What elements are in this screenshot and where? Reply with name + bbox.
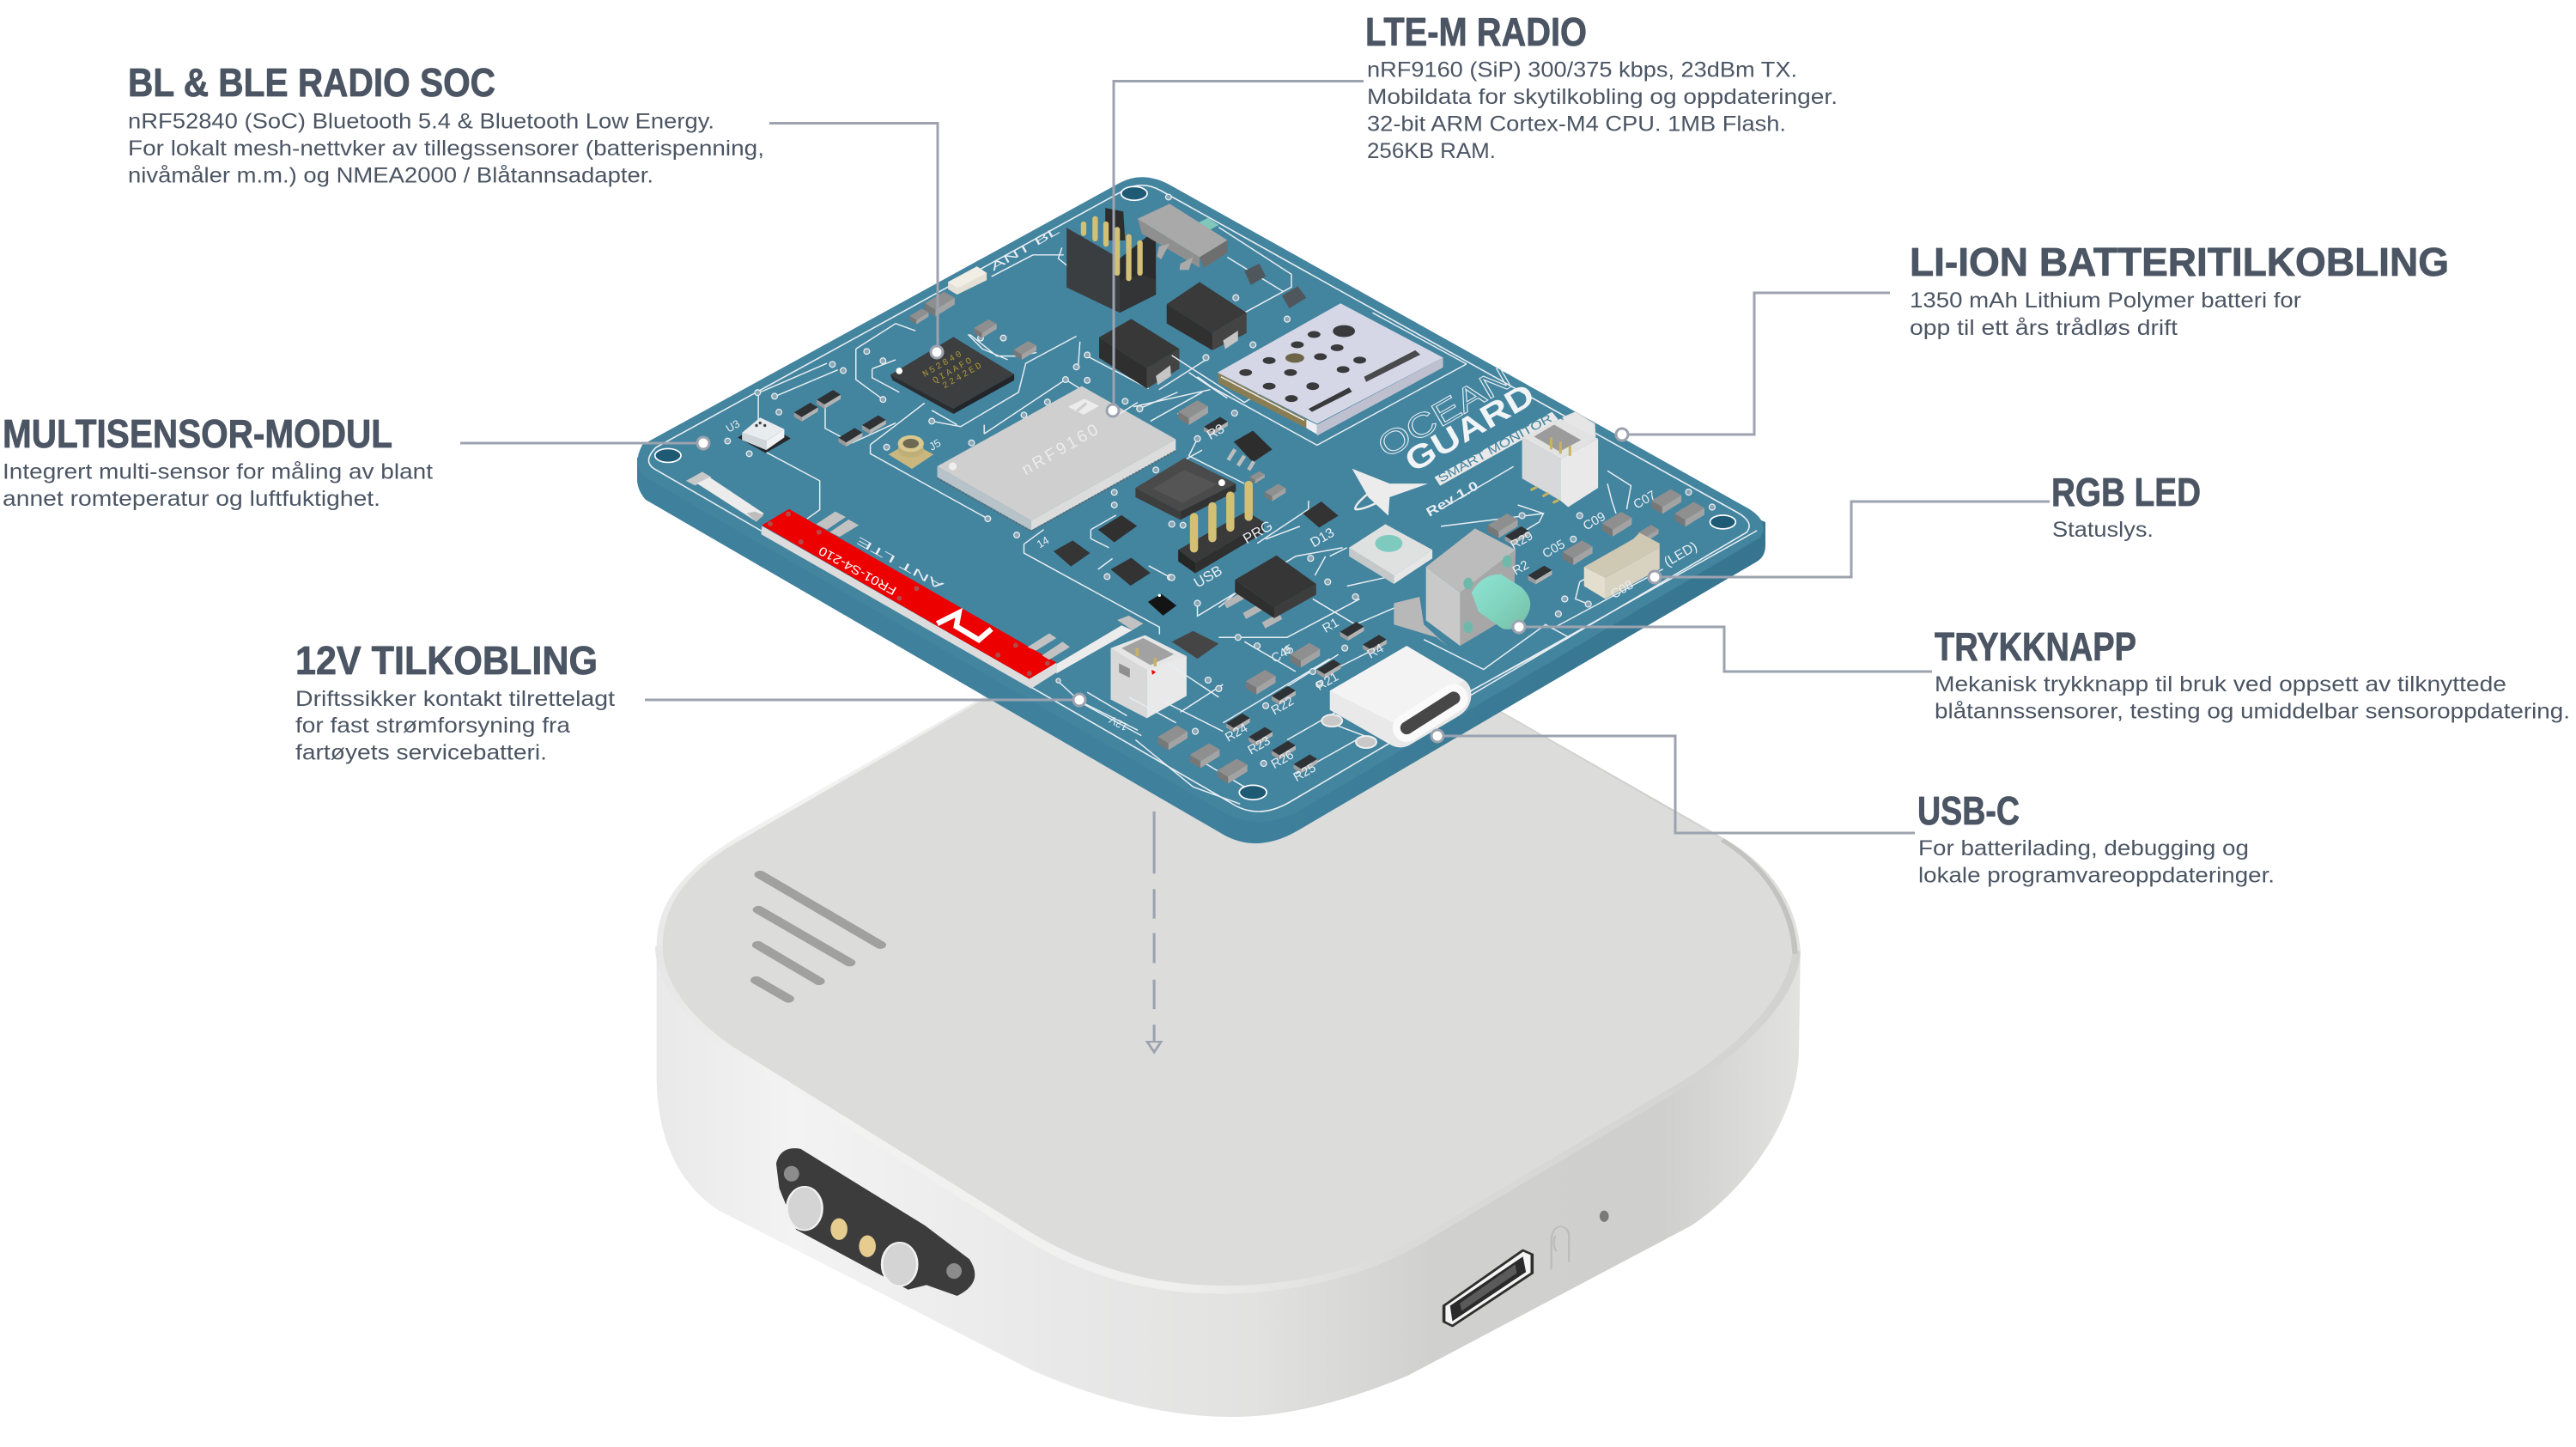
USB-C port on enclosure bbox=[1444, 1250, 1532, 1326]
heading: LI-ION BATTERITILKOBLING bbox=[1910, 240, 2449, 284]
body text: For batterilading, debugging og bbox=[1918, 836, 2249, 860]
callout BL and BLE radio bbox=[128, 60, 764, 187]
body text bbox=[1935, 672, 2570, 723]
silk component labels: (LED) bbox=[1662, 539, 1700, 570]
silk component labels: R29 bbox=[1508, 528, 1535, 553]
silk component labels: C05 bbox=[1540, 537, 1568, 562]
multisensor U3 bbox=[738, 417, 791, 453]
leader line BL radio bbox=[769, 124, 938, 348]
brand text OCEAN: OCEAN bbox=[1371, 360, 1518, 465]
silk traces right bbox=[1115, 228, 1757, 804]
status LED bbox=[1600, 1211, 1609, 1222]
silk component labels: D13 bbox=[1308, 526, 1337, 550]
body text: Integrert multi-sensor for måling av blant bbox=[3, 460, 433, 484]
silk component labels: C07 bbox=[1631, 488, 1659, 512]
leader line battery bbox=[1625, 293, 1890, 435]
brand bar SMART MONITOR bbox=[1435, 410, 1558, 486]
silk component labels: R1 bbox=[1320, 615, 1341, 636]
chip marking 2242ED: 2242ED bbox=[941, 361, 984, 392]
silk label ANT BL: ANT BL bbox=[988, 224, 1062, 273]
body text: nRF9160 (SiP) 300/375 kbps, 23dBm TX. bbox=[1367, 58, 1797, 82]
board surface bbox=[637, 177, 1764, 822]
heading: LTE-M RADIO bbox=[1365, 9, 1587, 54]
leader line multisensor bbox=[460, 441, 700, 445]
board silk outline bbox=[648, 185, 1749, 812]
silk component labels: PRG bbox=[1240, 517, 1275, 547]
small resistors bbox=[794, 390, 886, 447]
callout 12V bbox=[295, 638, 615, 764]
tactile button bbox=[1349, 524, 1432, 584]
vent slots bbox=[756, 874, 880, 999]
chip marking N52840: N52840 bbox=[921, 350, 963, 380]
silk traces left bbox=[758, 247, 1202, 736]
capacitors bbox=[1157, 400, 1704, 783]
BL antenna connector bbox=[909, 266, 1036, 360]
USB-C connector on board bbox=[1321, 646, 1471, 748]
leader line LTE-M radio bbox=[1114, 81, 1364, 407]
silk vias right bbox=[1137, 295, 1715, 766]
body text: annet romteperatur og luftfuktighet. bbox=[3, 487, 380, 511]
body text bbox=[1910, 289, 2301, 340]
12V connector bbox=[1111, 635, 1187, 718]
silk label J5: J5 bbox=[927, 437, 943, 453]
enclosure side walls bbox=[657, 559, 1801, 1417]
voltage regulator bbox=[1225, 556, 1316, 625]
nRF52840 chip bbox=[890, 337, 1014, 414]
board hole right bbox=[1710, 515, 1735, 529]
body text: nRF52840 (SoC) Bluetooth 5.4 & Bluetooth Low Energy. bbox=[128, 110, 714, 134]
transistor Q2 bbox=[1282, 286, 1306, 308]
LI-ION battery connector bbox=[1522, 412, 1598, 507]
dashed assembly arrow bbox=[1147, 812, 1161, 1052]
silk component labels: R26 bbox=[1269, 747, 1297, 772]
anchor dots bbox=[697, 346, 1661, 742]
callout push button bbox=[1935, 624, 2570, 723]
body text bbox=[128, 110, 764, 187]
body text: nivåmåler m.m.) og NMEA2000 / Blåtannsadapter. bbox=[128, 163, 653, 187]
heading: 12V TILKOBLING bbox=[295, 638, 598, 683]
antenna pads bbox=[816, 512, 1143, 673]
silk label U3: U3 bbox=[724, 417, 742, 435]
body text: Statuslys. bbox=[2052, 518, 2154, 542]
body text bbox=[295, 687, 615, 764]
double-row pin header bbox=[1066, 208, 1156, 313]
heading: BL & BLE RADIO SOC bbox=[128, 60, 495, 105]
silk label 12V: 12V bbox=[1107, 714, 1130, 733]
nRF9160 SiP module: nRF9160 bbox=[1018, 420, 1102, 479]
LTE antenna feed strip bbox=[686, 471, 763, 521]
enclosure rim bbox=[655, 946, 1801, 1294]
black IC with dot bbox=[1148, 594, 1176, 616]
silk label 14: 14 bbox=[1035, 534, 1051, 550]
inductor bbox=[1099, 319, 1179, 389]
silk component labels: C08 bbox=[1608, 578, 1636, 602]
inductor upper bbox=[1167, 282, 1247, 350]
callout battery bbox=[1910, 240, 2449, 340]
board edge bbox=[637, 258, 1765, 843]
transistor U13 bbox=[1228, 430, 1273, 470]
small IC U15 bbox=[1098, 515, 1137, 542]
LTE antenna: FR01-S4-210 bbox=[817, 543, 899, 597]
callout RGB LED bbox=[2051, 470, 2201, 542]
leader line RGB LED bbox=[1660, 502, 2050, 577]
small IC with pins bbox=[1111, 558, 1151, 586]
board hole bottom bbox=[1239, 785, 1267, 799]
resistors bbox=[1204, 417, 1552, 773]
magnetic pogo connector bbox=[776, 1148, 975, 1296]
body text: For lokalt mesh-nettvker av tillegssensorer (batterispenning, bbox=[128, 137, 764, 161]
board hole top bbox=[1121, 186, 1147, 200]
brand bar SMART MONITOR: SMART MONITOR bbox=[1436, 410, 1554, 485]
body text: Mobildata for skytilkobling og oppdateringer. bbox=[1367, 85, 1838, 109]
device enclosure bbox=[655, 696, 1801, 1417]
body text: blåtannssensorer, testing og umiddelbar sensoroppdatering. bbox=[1935, 699, 2570, 723]
nRF9160 SiP module bbox=[937, 386, 1176, 532]
push button TRYKKNAPP bbox=[1394, 528, 1530, 646]
silk component labels: R23 bbox=[1245, 733, 1273, 757]
body text: 256KB RAM. bbox=[1367, 139, 1496, 163]
U.FL antenna connector bbox=[889, 435, 933, 469]
IC near 12V connector bbox=[1172, 631, 1218, 659]
reset keyhole bbox=[1552, 1226, 1569, 1269]
silk component labels: C45 bbox=[1269, 641, 1297, 666]
programming pin header bbox=[1178, 485, 1264, 574]
transistor Q3 bbox=[1244, 264, 1266, 285]
silk component labels: R3 bbox=[1205, 422, 1227, 443]
silk component labels: C09 bbox=[1581, 509, 1608, 533]
heading: USB-C bbox=[1917, 788, 2020, 833]
LTE antenna bbox=[761, 509, 1056, 689]
body text bbox=[1367, 58, 1838, 163]
board right half bbox=[1115, 204, 1757, 805]
silk component labels bbox=[1191, 422, 1700, 785]
silk component labels: R25 bbox=[1291, 760, 1319, 785]
callout LTE-M radio bbox=[1365, 9, 1838, 163]
slide switch bbox=[1138, 204, 1227, 270]
silk component labels: R2 bbox=[1510, 557, 1532, 579]
flash QFN bbox=[1135, 458, 1236, 520]
chip marking QIAAFO: QIAAFO bbox=[932, 356, 974, 386]
silk label ANT LTE: ANT LTE bbox=[854, 534, 945, 592]
body text: lokale programvareoppdateringer. bbox=[1918, 864, 2275, 888]
SIM card holder bbox=[1218, 303, 1443, 435]
QFN D13 bbox=[1303, 502, 1339, 527]
silk vias left bbox=[725, 194, 1186, 683]
LED connector bbox=[1584, 532, 1660, 599]
silk component labels: R21 bbox=[1314, 669, 1341, 694]
heading: TRYKKNAPP bbox=[1935, 624, 2136, 669]
board hole left bbox=[655, 448, 681, 462]
enclosure right rim shadow bbox=[1722, 840, 1795, 954]
body text: Mekanisk trykknapp til bruk ved oppsett av tilknyttede bbox=[1935, 672, 2506, 696]
silk component labels: USB bbox=[1191, 562, 1225, 591]
silk component labels: R24 bbox=[1223, 720, 1250, 745]
body text: 1350 mAh Lithium Polymer batteri for bbox=[1910, 289, 2301, 313]
body text: for fast strømforsyning fra bbox=[295, 714, 570, 738]
silk component labels: R22 bbox=[1269, 694, 1297, 718]
body text: 32-bit ARM Cortex-M4 CPU. 1MB Flash. bbox=[1367, 112, 1786, 136]
body text: fartøyets servicebatteri. bbox=[295, 740, 547, 764]
body text bbox=[3, 460, 433, 511]
body text: Driftssikker kontakt tilrettelagt bbox=[295, 687, 615, 711]
brand text GUARD: GUARD bbox=[1399, 377, 1541, 479]
callout multisensor bbox=[3, 411, 433, 511]
brand logo sail bbox=[1352, 469, 1428, 515]
heading: RGB LED bbox=[2051, 470, 2201, 514]
body text: opp til ett års trådløs drift bbox=[1910, 316, 2178, 340]
leader line push button bbox=[1523, 627, 1932, 672]
board left half bbox=[654, 185, 1202, 737]
silk label Rev 1.0: Rev 1.0 bbox=[1424, 478, 1481, 520]
circuit board bbox=[637, 177, 1765, 843]
enclosure top surface bbox=[663, 559, 1793, 1286]
heading: MULTISENSOR-MODUL bbox=[3, 411, 392, 456]
silk component labels: R4 bbox=[1364, 641, 1386, 662]
callout USB-C bbox=[1917, 788, 2275, 888]
body text bbox=[1918, 836, 2275, 888]
leader line USB-C bbox=[1443, 736, 1915, 833]
leader line 12V bbox=[645, 699, 1076, 701]
small QFN 14 bbox=[1054, 540, 1091, 567]
